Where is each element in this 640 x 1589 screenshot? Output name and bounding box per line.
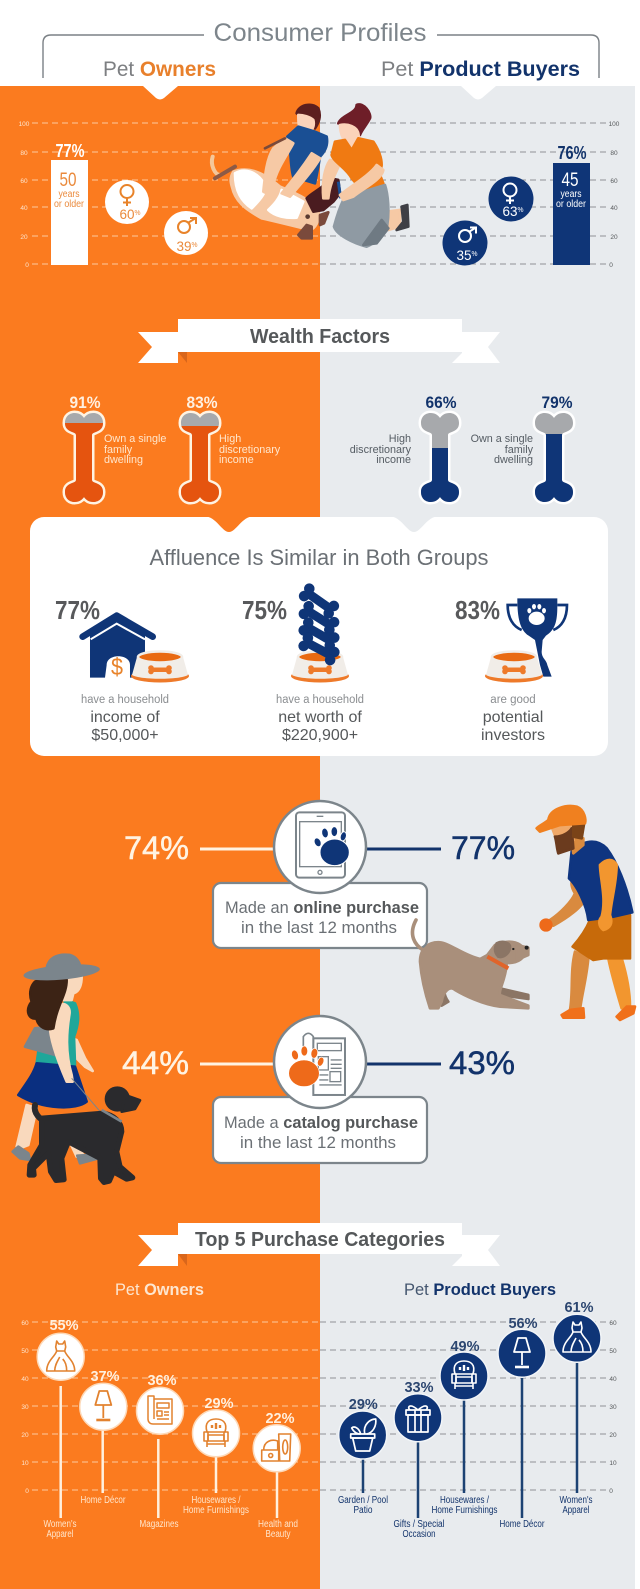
owners male 39%: % (191, 242, 198, 249)
bone: 79% own a single family dwelling: Own a single (471, 433, 533, 445)
bone: 91% own a single family dwelling: Own a single (104, 433, 166, 445)
stat: household income: income of (90, 709, 160, 726)
buyers category: housewares 49%: Home Furnishings (432, 1505, 498, 1516)
chart: consumer profile gridlines: 0 (609, 262, 613, 269)
icon: catalog with paw (274, 1016, 366, 1108)
stat: investors: investors (481, 727, 545, 744)
background: pet product buyers grey side (320, 86, 635, 1589)
buyers male 35% (442, 220, 488, 266)
chart: purchase categories gridlines: 20 (609, 1432, 617, 1439)
stat: owners catalog 44%: 44% (122, 1045, 189, 1081)
panel: affluence (30, 516, 608, 756)
buyers category: garden 29%: Patio (354, 1505, 373, 1516)
bar: owners 50 years or older (51, 141, 88, 265)
chart: consumer profile gridlines: 20 (610, 234, 618, 241)
header: consumer profiles (43, 19, 599, 81)
stat: household income: $50,000+ (91, 727, 159, 744)
connector lines: online purchase (200, 848, 275, 850)
bone: 66% high discretionary income: income (376, 454, 411, 466)
buyers category: home decor 56%: Home Décor (500, 1519, 545, 1530)
chart: consumer profile gridlines: 100 (609, 121, 620, 128)
icon: bowl with stacked bones (291, 581, 349, 682)
chart: purchase categories gridlines: 0 (25, 1488, 29, 1495)
owners category: women's apparel 55% (37, 1318, 84, 1540)
chart: consumer profile gridlines: 60 (20, 178, 28, 185)
owners male 39%: 39 (176, 238, 192, 254)
bone: 83% high discretionary income: income (219, 454, 254, 466)
heading: pet owners categories: Pet Owners (115, 1280, 204, 1299)
bone: 66% high discretionary income: 66% (426, 394, 457, 412)
chart: consumer profile gridlines (19, 121, 620, 269)
stat: net worth: 75% (242, 595, 287, 625)
owners male 39% (164, 211, 208, 255)
stat: buyers catalog 43%: 43% (449, 1045, 515, 1081)
stat: investors: are good (490, 694, 536, 706)
chart: consumer profile gridlines: 60 (610, 178, 618, 185)
bone: 91% own a single family dwelling: 91% (70, 394, 101, 412)
background: pet owners orange side (0, 86, 320, 1589)
bone: 79% own a single family dwelling: dwelling (494, 454, 533, 466)
icon: bowl (131, 652, 189, 682)
stat: investors (455, 595, 567, 744)
owners category: health and beauty 22%: Health and (258, 1519, 298, 1530)
bone: 83% high discretionary income: discretionary (219, 444, 281, 456)
owners category: health and beauty 22%: 22% (265, 1411, 295, 1427)
heading: pet product buyers categories: Pet Product Buyers (404, 1280, 556, 1299)
callout: online purchase (213, 883, 427, 948)
owners category: health and beauty 22%: Beauty (266, 1529, 290, 1540)
bar: owners 50 years or older: 50 (60, 170, 76, 191)
chart: purchase categories gridlines: 40 (609, 1376, 617, 1383)
owners category: housewares 29%: Home Furnishings (183, 1505, 249, 1516)
bar: buyers 45 years or older: 45 (562, 170, 578, 191)
bone: 79% own a single family dwelling (471, 394, 573, 502)
owners female 60%: 60 (120, 206, 135, 222)
buyers category: gifts 33%: Occasion (402, 1529, 436, 1540)
bone: 66% high discretionary income: High (389, 433, 411, 445)
owners category: housewares 29%: 29% (204, 1396, 234, 1412)
chart: purchase categories gridlines: 50 (21, 1348, 29, 1355)
owners category: home decor 37% (80, 1369, 127, 1506)
owners category: home decor 37%: Home Décor (80, 1495, 126, 1506)
buyers category: garden 29%: Garden / Pool (338, 1495, 388, 1506)
chart: consumer profile gridlines: 80 (610, 150, 618, 157)
chart: purchase categories gridlines: 30 (609, 1404, 617, 1411)
stat: owners online 74%: 74% (124, 830, 189, 866)
buyers female 63%: % (517, 207, 524, 214)
bar: buyers 45 years or older: or older (556, 199, 587, 210)
buyers female 63%: 63 (502, 203, 518, 219)
chart: purchase categories gridlines: 50 (609, 1348, 617, 1355)
illustration: man with ball and dog (413, 806, 635, 1020)
stat: household income: 77% (55, 595, 100, 625)
wealth factors ribbon (138, 319, 500, 363)
bone: 83% high discretionary income: High (219, 433, 241, 445)
owners category: magazines 36%: Magazines (140, 1519, 178, 1530)
stat: net worth: $220,900+ (282, 727, 358, 744)
owners category: home decor 37%: 37% (90, 1369, 120, 1385)
buyers male 35%: 35 (456, 247, 472, 263)
chart: purchase categories gridlines: 10 (21, 1460, 29, 1467)
stat: household income: $ (111, 654, 123, 681)
icon: tablet with paw (274, 801, 366, 893)
header bracket (43, 35, 599, 78)
bone: 79% own a single family dwelling: 79% (542, 394, 573, 412)
panel heading: Affluence Is Similar in Both Groups (150, 545, 488, 570)
chart: purchase categories gridlines (21, 1320, 617, 1495)
owners category: women's apparel 55%: Apparel (46, 1529, 74, 1540)
buyers male 35%: % (471, 251, 478, 258)
stat: household income: have a household (81, 694, 169, 706)
buyers category: women's apparel 61%: 61% (564, 1300, 594, 1316)
title: Consumer Profiles (214, 19, 426, 47)
chart: purchase categories gridlines: 30 (21, 1404, 29, 1411)
buyers category: gifts 33%: 33% (404, 1380, 434, 1396)
bone: 91% own a single family dwelling: dwelling (104, 454, 143, 466)
owners category: women's apparel 55%: Women's (44, 1519, 76, 1530)
buyers category: women's apparel 61%: Apparel (562, 1505, 590, 1516)
buyers category: housewares 49% (432, 1339, 498, 1516)
stat: net worth: net worth of (278, 709, 362, 726)
buyers category: housewares 49%: Housewares / (440, 1495, 489, 1506)
buyers category: gifts 33% (394, 1380, 444, 1540)
chart: purchase categories gridlines: 20 (21, 1432, 29, 1439)
chart: consumer profile gridlines: 100 (19, 121, 30, 128)
bone: 83% high discretionary income: 83% (186, 394, 218, 412)
owners category: housewares 29% (183, 1396, 249, 1516)
callout: online purchase: in the last 12 months (241, 918, 397, 937)
icon: trophy and bowl (485, 598, 567, 682)
header notches (143, 86, 496, 100)
bar: buyers 45 years or older (553, 143, 590, 265)
heading: pet owners: Pet Owners (103, 58, 216, 81)
chart: purchase categories gridlines: 60 (21, 1320, 29, 1327)
buyers female 63% (488, 176, 534, 222)
bone: 66% high discretionary income (350, 394, 459, 502)
owners category: magazines 36% (136, 1373, 184, 1530)
owners category: health and beauty 22% (253, 1411, 300, 1540)
bar: buyers 45 years or older: 76% (558, 143, 586, 163)
owners category: housewares 29%: Housewares / (192, 1495, 241, 1506)
buyers category: women's apparel 61%: Women's (560, 1495, 592, 1506)
owners female 60%: % (134, 210, 140, 217)
top 5 purchase categories ribbon (138, 1223, 500, 1266)
bar: buyers 45 years or older: years (560, 189, 582, 200)
illustration: woman walking black poodle (13, 955, 140, 1182)
buyers category: housewares 49%: 49% (450, 1339, 480, 1355)
callout: catalog purchase (213, 1097, 427, 1163)
stat: investors: potential (483, 709, 543, 726)
buyers category: home decor 56% (498, 1316, 546, 1530)
owners female 60% (105, 180, 149, 224)
stat: net worth (242, 581, 364, 744)
wealth factors ribbon: Wealth Factors (250, 326, 390, 348)
chart: consumer profile gridlines: 0 (25, 262, 29, 269)
buyers category: home decor 56%: 56% (508, 1316, 538, 1332)
chart: purchase categories gridlines: 10 (609, 1460, 617, 1467)
stat: buyers online 77%: 77% (451, 830, 515, 866)
bar: owners 50 years or older: 77% (56, 141, 84, 161)
bone: 66% high discretionary income: discretionary (350, 444, 412, 456)
buyers category: garden 29%: 29% (349, 1397, 378, 1413)
bar: owners 50 years or older: years (58, 189, 80, 200)
owners category: women's apparel 55%: 55% (49, 1318, 79, 1334)
bar: owners 50 years or older: or older (54, 199, 85, 210)
chart: purchase categories gridlines: 60 (609, 1320, 617, 1327)
heading: pet product buyers: Pet Product Buyers (381, 58, 580, 81)
bone: 83% high discretionary income (181, 394, 281, 502)
connector lines: catalog purchase (200, 1062, 275, 1066)
stat: net worth: have a household (276, 694, 364, 706)
bone: 79% own a single family dwelling: family (505, 444, 534, 456)
callout: catalog purchase: in the last 12 months (240, 1133, 396, 1152)
bone: 91% own a single family dwelling (65, 394, 166, 502)
chart: purchase categories gridlines: 0 (609, 1488, 613, 1495)
stat: investors: 83% (455, 595, 500, 625)
bone: 91% own a single family dwelling: family (104, 444, 133, 456)
top 5 purchase categories ribbon: Top 5 Purchase Categories (195, 1229, 445, 1251)
illustration: couple petting dog (212, 104, 408, 247)
chart: consumer profile gridlines: 40 (20, 205, 28, 212)
callout: online purchase: Made an online purchase (225, 898, 419, 917)
stat: household income (55, 595, 189, 744)
chart: consumer profile gridlines: 80 (20, 150, 28, 157)
buyers category: women's apparel 61% (553, 1300, 601, 1516)
dog tail overlapping callout (412, 920, 423, 950)
icon: dog house (83, 616, 153, 678)
buyers category: garden 29% (338, 1397, 388, 1516)
callout: catalog purchase: Made a catalog purchase (224, 1113, 418, 1132)
buyers category: gifts 33%: Gifts / Special (394, 1519, 444, 1530)
owners category: magazines 36%: 36% (147, 1373, 177, 1389)
chart: consumer profile gridlines: 20 (20, 234, 28, 241)
chart: consumer profile gridlines: 40 (610, 205, 618, 212)
chart: purchase categories gridlines: 40 (21, 1376, 29, 1383)
